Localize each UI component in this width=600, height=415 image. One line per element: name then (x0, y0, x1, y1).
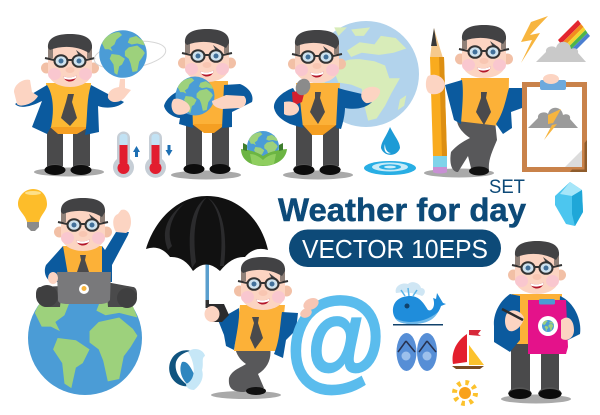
hand on pencil (426, 75, 445, 94)
globe under the seated character (28, 281, 142, 395)
hand on umbrella (204, 304, 229, 322)
title: Weather for day (278, 192, 526, 228)
badge: vector 10eps: VECTOR 10EPS (302, 234, 488, 264)
icon: pencil (430, 28, 447, 174)
icon: at sign: @ (286, 274, 385, 400)
laptop (57, 272, 111, 304)
hands and pen (505, 310, 574, 340)
character: presenter with pink clipboard (494, 241, 580, 404)
icon: lightning bolt (521, 16, 548, 63)
character: presenter leaning on a pencil (424, 25, 522, 178)
icon: sun (454, 382, 476, 404)
icon: thermometer falling (145, 132, 172, 178)
icon: water ripple (364, 161, 416, 175)
icon: flip flops (396, 333, 437, 371)
label: SET: SET (489, 176, 525, 198)
pink clipboard (528, 299, 568, 354)
icon: water drop (381, 127, 400, 155)
character: presenter under the umbrella (204, 257, 298, 399)
hands (14, 80, 38, 106)
icon: held globe (176, 76, 214, 116)
icon: light bulb (18, 189, 47, 231)
hands (284, 87, 380, 116)
icon: sailboat (452, 330, 484, 369)
icon: clipboard with storm cloud (524, 74, 587, 172)
icon: water swirl (169, 349, 205, 390)
icon: spinning globe (93, 30, 167, 78)
icon: thermometer rising (113, 132, 140, 178)
character: presenter holding a globe (164, 29, 252, 180)
icon: rainbow with cloud (536, 20, 590, 62)
microphone (292, 76, 313, 106)
hands (172, 95, 246, 115)
icon: whale (393, 282, 446, 326)
icon: blue crystal (555, 182, 583, 226)
character: presenter with microphone (274, 30, 380, 180)
icon: black umbrella (146, 196, 268, 308)
head (41, 34, 99, 87)
icon: globe in green leaves (241, 131, 287, 166)
waving hand (113, 210, 131, 233)
character: presenter spinning a globe (14, 30, 167, 176)
big pale globe (313, 21, 419, 127)
character: presenter sitting with laptop (36, 198, 137, 308)
